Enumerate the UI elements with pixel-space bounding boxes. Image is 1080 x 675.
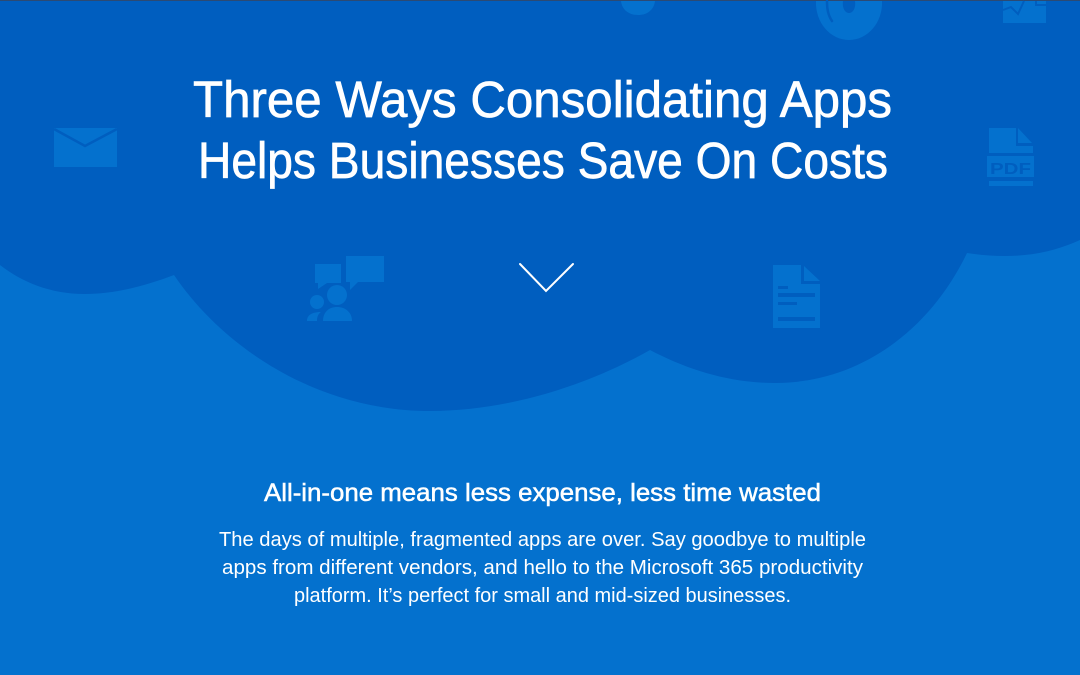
PDF label: PDF	[990, 161, 1031, 178]
arrow: down chevron	[520, 264, 573, 291]
subheading: All-in-one means less expense, less time wasted	[264, 479, 821, 507]
body text	[219, 529, 866, 607]
icon: disc top centre	[621, 1, 655, 15]
cloud header background	[0, 0, 1080, 411]
icon: chart document	[1003, 1, 1046, 23]
top edge line	[0, 0, 1080, 1]
icon: people with speech bubbles	[307, 256, 384, 321]
icon: text document	[773, 265, 820, 328]
icon: envelope	[54, 128, 117, 167]
body text: The days of multiple, fragmented apps are over. Say goodbye to multiple	[219, 529, 866, 551]
body text: platform. It’s perfect for small and mid-sized businesses.	[294, 585, 791, 607]
title: Helps Businesses Save On Costs	[198, 132, 888, 189]
icon: music disc	[816, 1, 882, 40]
title	[193, 71, 892, 189]
body text: apps from different vendors, and hello to the Microsoft 365 productivity	[222, 557, 863, 579]
title: Three Ways Consolidating Apps	[193, 71, 892, 128]
icon: PDF document	[987, 128, 1034, 186]
